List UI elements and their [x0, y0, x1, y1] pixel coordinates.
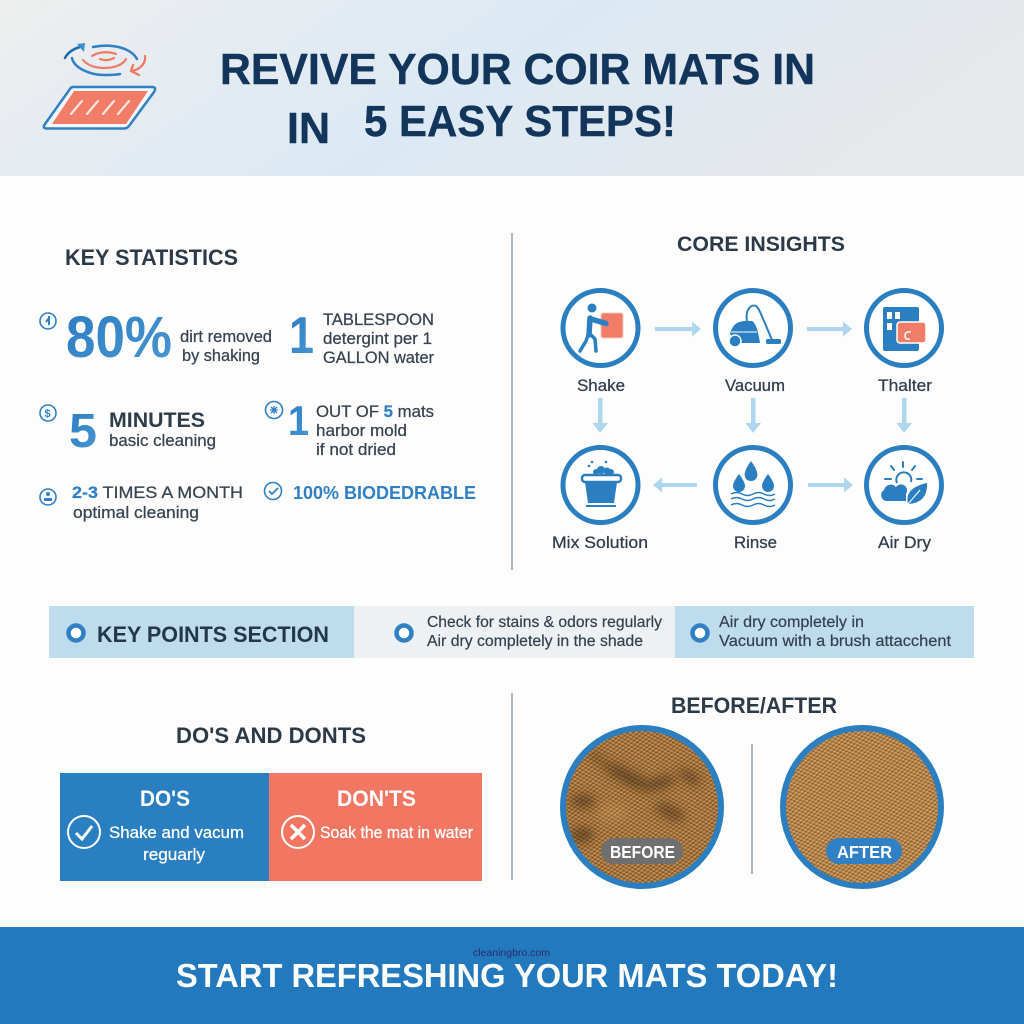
- stat: 100 percent biodegradable: 100% BIODEDRABLE: [293, 482, 476, 503]
- stat: 80 percent: 80%: [66, 305, 172, 370]
- icon: vacuum: [716, 290, 790, 366]
- step labels: Air Dry: [878, 534, 932, 552]
- panel: key points section: Air dry completely in: [719, 614, 864, 631]
- after photo: AFTER: [837, 842, 892, 862]
- do's card: reguarly: [143, 846, 206, 864]
- icon: rinse: [716, 448, 790, 522]
- panel: before/after: [560, 693, 944, 889]
- step labels: Rinse: [734, 534, 777, 552]
- header band: [0, 0, 1024, 176]
- don'ts card: Soak the mat in water: [320, 824, 473, 842]
- call to action: START REFRESHING YOUR MATS TODAY!: [176, 958, 838, 995]
- flow arrows: [592, 322, 912, 492]
- panel: key statistics: [40, 245, 476, 522]
- stat: 1 out of 5: if not dried: [316, 441, 396, 459]
- heading: key statistics: KEY STATISTICS: [65, 245, 238, 270]
- title: IN: [287, 104, 330, 153]
- icon: coir mat with swirl: [44, 43, 155, 128]
- stat: 5 minutes: $: [44, 408, 51, 420]
- do's card: DO'S: [140, 786, 190, 811]
- before photo: [560, 725, 724, 889]
- title: [220, 45, 815, 153]
- divider: [511, 233, 513, 880]
- stat: 80 percent: [40, 305, 272, 370]
- step labels: Mix Solution: [552, 534, 648, 552]
- icon: air dry: [866, 448, 942, 522]
- step labels: Thalter: [878, 377, 933, 395]
- don'ts card: DON'TS: [337, 786, 416, 811]
- step labels: Vacuum: [725, 377, 785, 395]
- stat: 1 tablespoon: 1: [289, 307, 314, 365]
- stat: 2-3 times a month: optimal cleaning: [73, 504, 199, 522]
- step labels: [552, 377, 933, 552]
- stat: 1 out of 5: 1: [288, 397, 309, 444]
- don'ts card: [269, 773, 482, 881]
- title: REVIVE YOUR COIR MATS IN: [220, 45, 815, 94]
- stat: 2-3 times a month: [40, 483, 243, 522]
- title: 5 EASY STEPS!: [364, 97, 676, 146]
- stat: 1 tablespoon: TABLESPOON: [323, 310, 434, 329]
- step labels: Shake: [577, 377, 625, 395]
- icon: mix solution: [563, 448, 638, 522]
- stat: 80 percent: dirt removed: [180, 328, 272, 346]
- stat: 5 minutes: [40, 405, 216, 458]
- panel: do's and don'ts: [60, 723, 482, 881]
- stat: 1 tablespoon: [289, 307, 435, 367]
- panel: key points section: Air dry completely in the shade: [427, 633, 643, 650]
- after photo: [780, 725, 944, 889]
- stat: 1 tablespoon: detergint per 1: [323, 330, 432, 348]
- panel: key points section: [49, 606, 974, 658]
- heading: do's and donts: DO'S AND DONTS: [176, 723, 366, 748]
- do's card: Shake and vacum: [109, 824, 244, 842]
- stat: 2-3 times a month: 2-3 TIMES A MONTH: [72, 483, 243, 502]
- heading: core insights: CORE INSIGHTS: [677, 232, 845, 256]
- stat: 1 out of 5: [266, 397, 434, 459]
- icon: shake: [563, 290, 638, 366]
- stat: 1 out of 5: harbor mold: [316, 422, 407, 440]
- heading: before/after: BEFORE/AFTER: [671, 693, 837, 718]
- stat: 5 minutes: 5: [69, 405, 97, 458]
- stat: 1 tablespoon: GALLON water: [323, 349, 435, 367]
- panel: key points section: KEY POINTS SECTION: [97, 622, 329, 647]
- panel: key points section: Check for stains & odors regularly: [427, 614, 662, 631]
- do's card: [60, 773, 269, 881]
- before photo: BEFORE: [610, 842, 675, 862]
- stat: 5 minutes: MINUTES: [109, 409, 205, 432]
- stat: 80 percent: by shaking: [182, 347, 260, 365]
- stat: 1 out of 5: OUT OF 5 mats: [316, 403, 434, 421]
- footer banner: [0, 927, 1024, 1024]
- icon: thalter: [866, 290, 942, 366]
- source credit: cleaningbro.com: [473, 947, 550, 959]
- panel: key points section: Vacuum with a brush attacchent: [719, 633, 952, 650]
- stat: 5 minutes: basic cleaning: [109, 432, 216, 450]
- panel: core insights: [552, 232, 942, 552]
